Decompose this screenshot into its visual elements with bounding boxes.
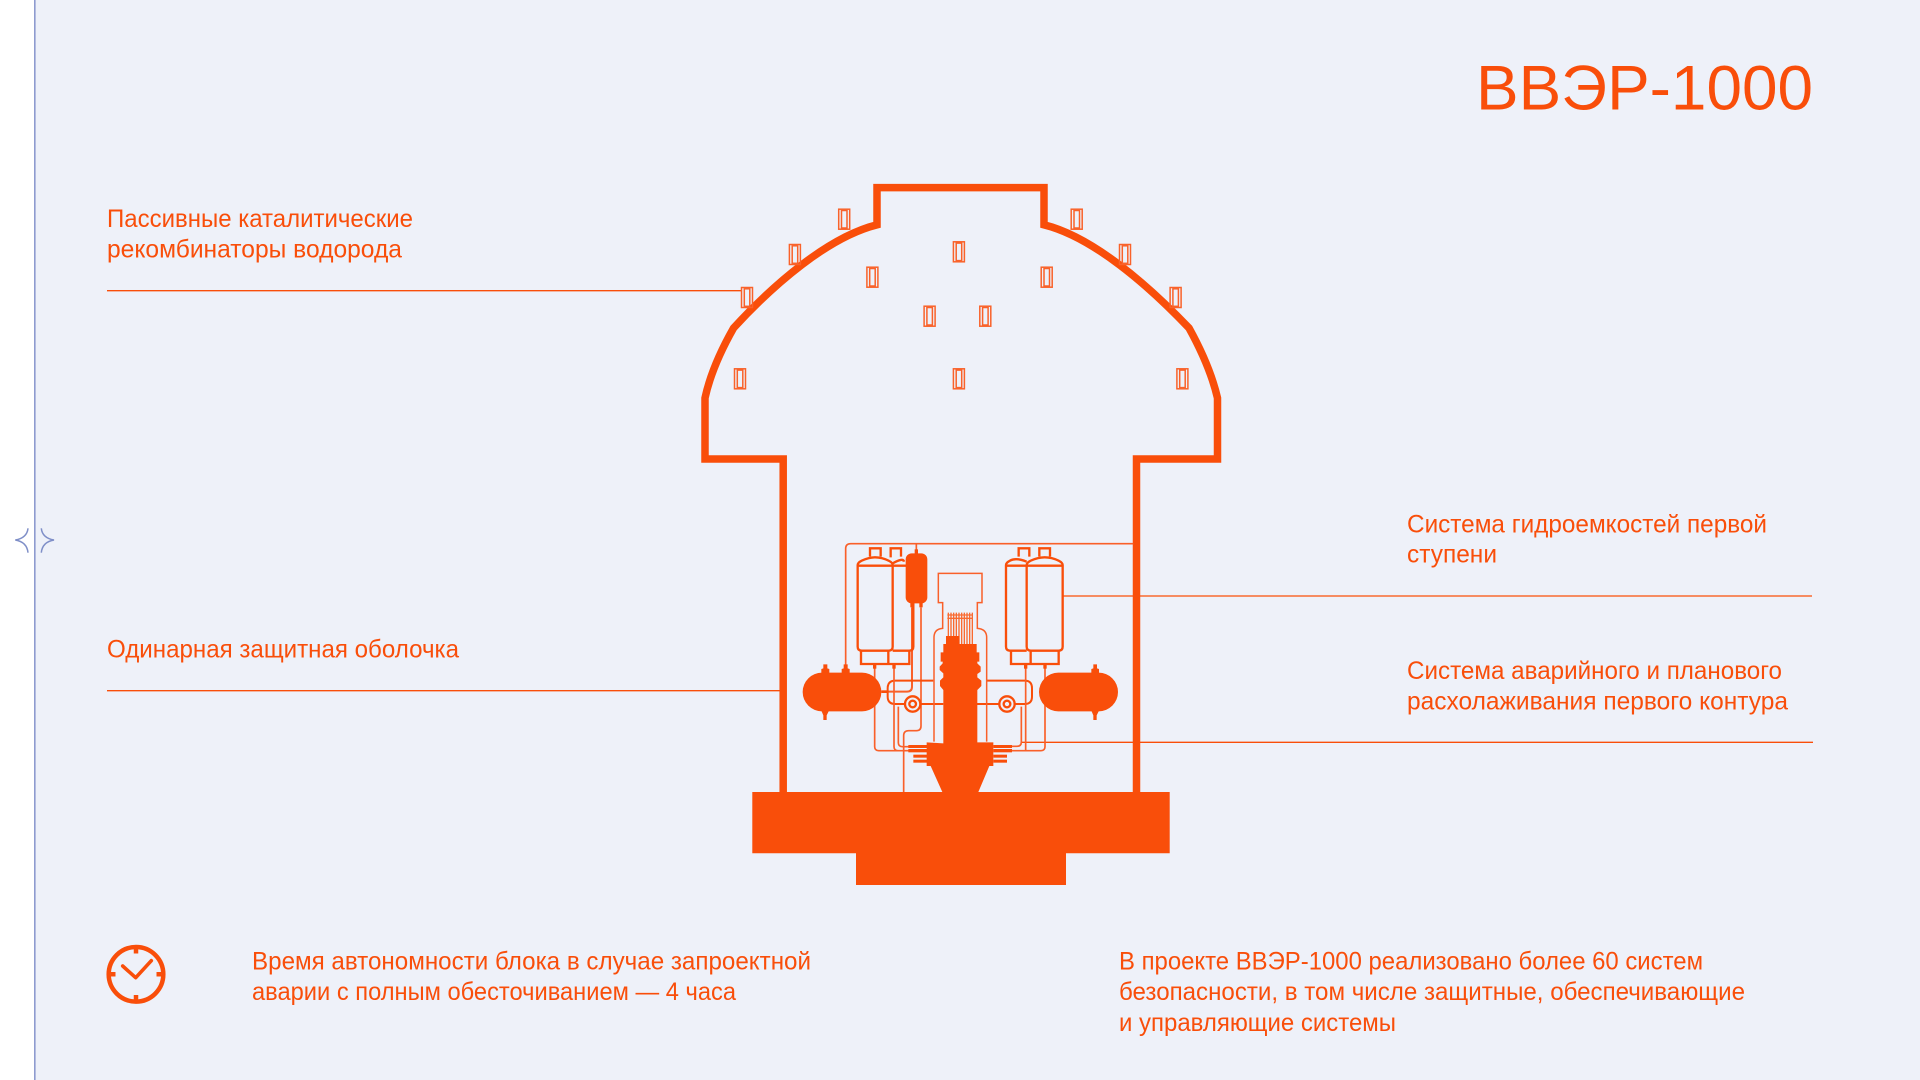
side rail with star marker (15, 0, 54, 1080)
pressurizer tank (906, 549, 927, 607)
containment dome and walls (705, 188, 1218, 795)
text: safety systems (1119, 948, 1745, 1037)
text: safety systems: и управляющие системы (1119, 1009, 1396, 1037)
reactor coolant system diagram (803, 544, 1133, 792)
label: cooldown system (1407, 657, 1788, 716)
left tanks (858, 548, 913, 669)
right accumulator (1039, 664, 1118, 720)
icon: clock (109, 947, 163, 1002)
control rods (947, 613, 973, 644)
leader line: recombiners (107, 290, 741, 292)
text: autonomy time: аварии с полным обесточиванием — 4 часа (252, 978, 736, 1006)
text: safety systems: В проекте ВВЭР-1000 реализовано более 60 систем (1119, 948, 1703, 976)
right pump (999, 696, 1015, 712)
label: accumulators: ступени (1407, 541, 1497, 569)
label: accumulators: Система гидроемкостей первой (1407, 510, 1767, 538)
reactor vessel (927, 636, 993, 792)
label: single containment: Одинарная защитная оболочка (107, 636, 459, 664)
hydrogen recombiners (734, 209, 1188, 389)
label: recombiners: рекомбинаторы водорода (107, 235, 402, 263)
title: ВВЭР-1000 (1476, 53, 1813, 123)
label: recombiners (107, 205, 413, 263)
leader line: accumulators (1063, 595, 1812, 597)
leader line: cooldown (1021, 741, 1813, 743)
text: safety systems: безопасности, в том числе защитные, обеспечивающие (1119, 978, 1745, 1006)
label: accumulators (1407, 510, 1767, 569)
text: autonomy time (252, 948, 811, 1006)
left pump (905, 696, 920, 712)
text: autonomy time: Время автономности блока в случае запроектной (252, 948, 811, 976)
leader line: containment (107, 690, 780, 692)
pipework (846, 544, 1133, 792)
label: cooldown system: расхолаживания первого контура (1407, 688, 1788, 716)
label: recombiners: Пассивные каталитические (107, 205, 413, 233)
reactor nozzles (908, 745, 1012, 763)
label: cooldown system: Система аварийного и планового (1407, 657, 1782, 685)
right tanks (1006, 548, 1063, 669)
foundation slab (752, 792, 1170, 885)
left accumulator (803, 664, 888, 720)
